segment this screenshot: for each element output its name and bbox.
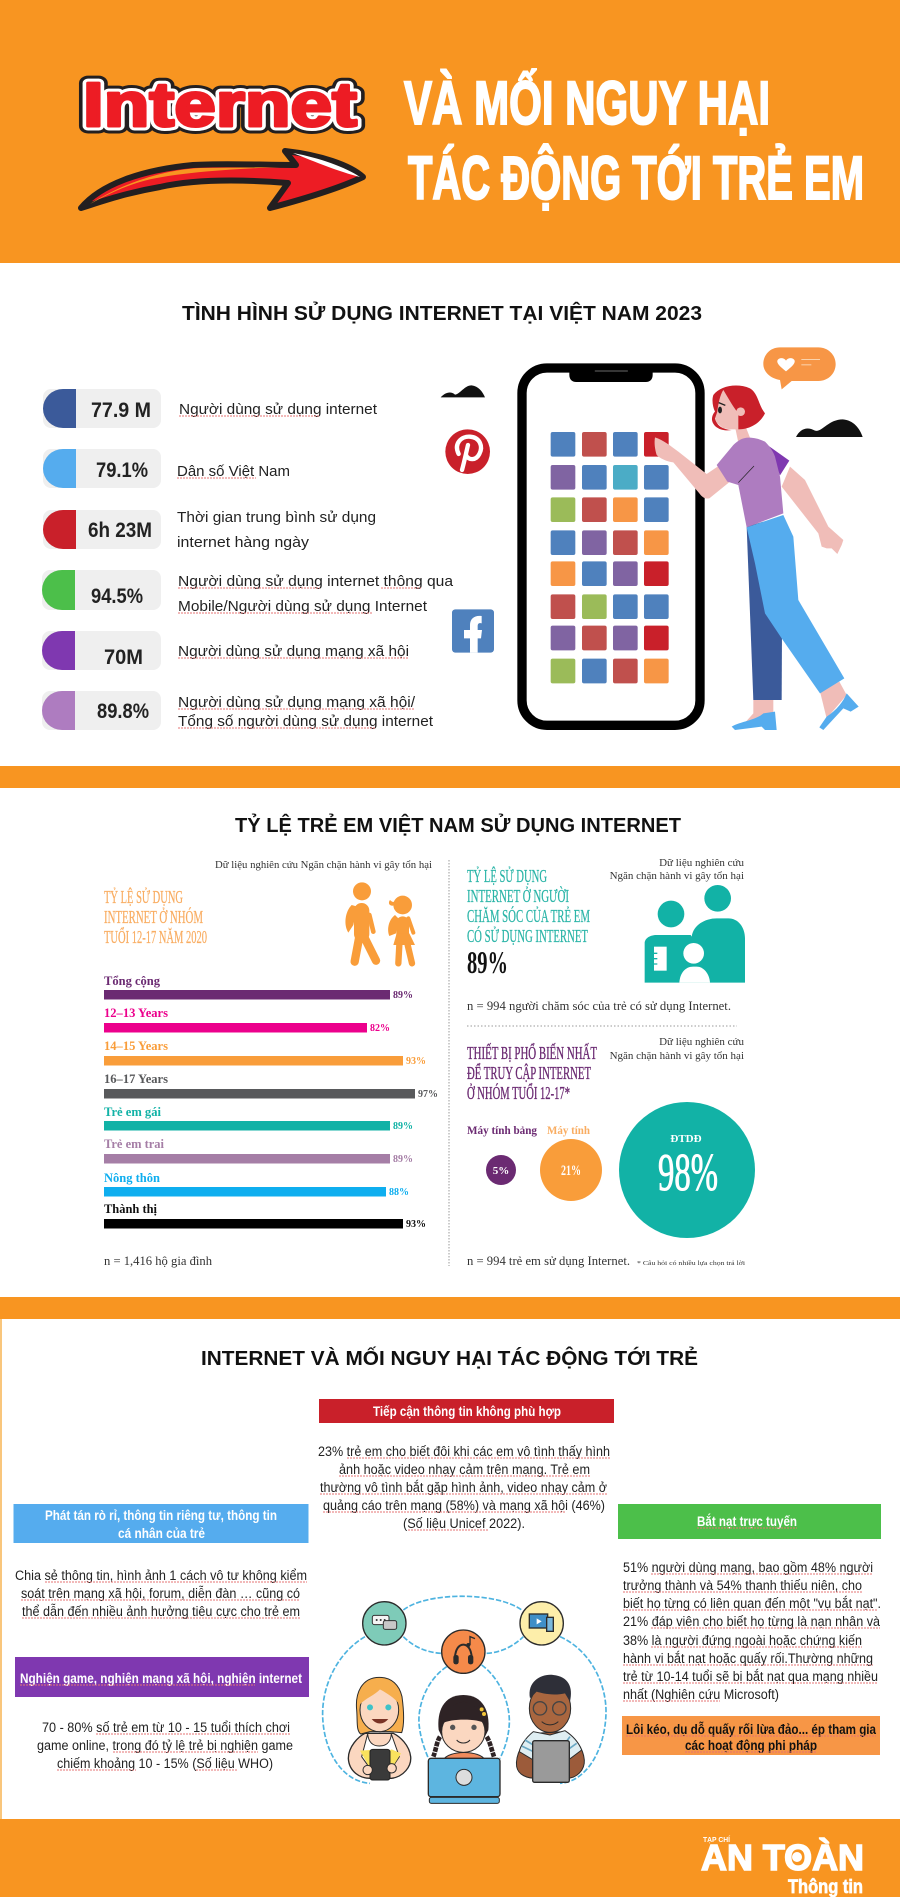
stat: social share — [42, 691, 434, 730]
stat: social network users: Người dùng sử dụng mạng xã hội — [178, 643, 409, 660]
heading bar: cá nhân của trẻ — [118, 1526, 205, 1541]
body text: 23% trẻ em cho biết đôi khi các em vô tình thấy hình — [318, 1444, 610, 1459]
bar: boys — [104, 1136, 413, 1165]
stat: mobile share: Người dùng sử dụng internet thông qua — [178, 573, 454, 590]
chart title: TỶ LỆ SỬ DỤNG — [104, 886, 183, 907]
bar: rural: 88% — [389, 1187, 409, 1198]
body text — [15, 1568, 307, 1619]
dashed connection lines — [323, 1596, 606, 1783]
body text: trưởng thành và 54% thanh thiếu niên, cho — [623, 1578, 862, 1593]
caregiver title: INTERNET Ở NGƯỜI — [467, 885, 569, 906]
body text: Chia sẻ thông tin, hình ảnh 1 cách vô tư không kiểm — [15, 1568, 307, 1583]
Internet wordmark: Internet — [83, 71, 357, 140]
logo — [701, 1835, 864, 1897]
stat: daily time online: 6h 23M — [88, 519, 152, 542]
icon: two children with backpacks — [345, 882, 415, 963]
heading bar — [14, 1504, 308, 1543]
icon: pinterest — [445, 429, 490, 474]
body text: quảng cáo trên mạng (58%) và mạng xã hội (46%) — [323, 1498, 605, 1513]
bar: total: Tổng cộng — [104, 973, 160, 988]
panel: usage statistics — [42, 389, 454, 730]
bar: 12-13: 82% — [370, 1023, 390, 1034]
stat: mobile share: 94.5% — [91, 585, 143, 608]
body text: game online, trong đó tỷ lệ trẻ bị nghiện game — [37, 1738, 293, 1753]
stat: population: 79.1% — [96, 459, 148, 482]
bar chart — [104, 973, 438, 1230]
illustration: children using devices — [323, 1596, 606, 1803]
heading bar: Bắt nạt trực tuyến — [697, 1514, 797, 1529]
bar: urban: Thành thị — [104, 1201, 157, 1216]
panel: addiction — [15, 1657, 309, 1771]
heading bar — [618, 1504, 881, 1539]
Internet wordmark: Internet — [83, 71, 357, 140]
bar: girls: 89% — [393, 1121, 413, 1132]
app grid — [551, 432, 669, 683]
heading bar: Phát tán rò rỉ, thông tin riêng tư, thông tin — [45, 1508, 277, 1523]
heading bar — [15, 1657, 309, 1697]
footer band — [0, 1819, 900, 1897]
body text: biết họ từng có liên quan đến một "vụ bắt nạt". — [623, 1596, 881, 1611]
icon: small cloud — [441, 385, 485, 397]
header band — [0, 0, 900, 263]
logo: TẠP CHÍ — [703, 1835, 731, 1844]
heading bar: Nghiện game, nghiện mạng xã hội, nghiện internet — [20, 1671, 302, 1686]
callout — [622, 1716, 880, 1755]
body text: chiếm khoảng 10 - 15% (Số liệu WHO) — [57, 1756, 273, 1771]
footnote: * Câu hỏi có nhiều lựa chọn trả lời — [637, 1260, 745, 1267]
bar: girls: Trẻ em gái — [104, 1104, 161, 1119]
divider band 2 — [0, 1297, 900, 1319]
device title: ĐỂ TRUY CẬP INTERNET — [467, 1062, 591, 1083]
chart title: INTERNET Ở NHÓM — [104, 906, 203, 927]
body text: 38% là người đứng ngoài hoặc chứng kiến — [623, 1633, 862, 1648]
body text: hành vi bắt nạt hoặc quấy rối.Thường những — [623, 1651, 873, 1666]
phone share: ĐTDĐ — [670, 1133, 702, 1145]
phone share: 98% — [658, 1144, 718, 1202]
bar: 14-15 — [104, 1038, 426, 1067]
body text: thường vô tình bắt gặp hình ảnh, video nhạy cảm ở — [320, 1480, 607, 1495]
stat: social share: 89.8% — [97, 700, 149, 723]
body text: thể dẫn đến nhiều ảnh hưởng tiêu cực cho trẻ em — [22, 1604, 300, 1619]
main title — [404, 69, 864, 212]
bar: 16-17: 16–17 Years — [104, 1071, 168, 1086]
sample size note: n = 1,416 hộ gia đình — [104, 1254, 213, 1268]
heading: dangers to children: INTERNET VÀ MỐI NGUY HẠI TÁC ĐỘNG TỚI TRẺ — [201, 1346, 698, 1370]
bar: 12-13 — [104, 1005, 390, 1034]
panel: usage by age group — [104, 859, 438, 1268]
stat: social network users — [42, 631, 409, 670]
sample note: n = 994 trẻ em sử dụng Internet. — [467, 1254, 630, 1268]
tablet share: Máy tính bảng — [467, 1125, 537, 1137]
caregiver title: CÓ SỬ DỤNG INTERNET — [467, 925, 588, 946]
body text: ảnh hoặc video nhạy cảm trên mạng. Trẻ em — [339, 1462, 590, 1477]
bar: total — [104, 973, 413, 1001]
stat: social share: Người dùng sử dụng mạng xã hội/ — [178, 694, 416, 711]
stat: daily time online: Thời gian trung bình sử dụng — [177, 509, 376, 526]
callout: các hoạt động phi pháp — [685, 1738, 817, 1753]
source note — [610, 1036, 744, 1062]
body text — [37, 1720, 293, 1771]
heading bar: Tiếp cận thông tin không phù hợp — [373, 1404, 561, 1419]
bar: 14-15: 93% — [406, 1056, 426, 1067]
computer share: 21% — [561, 1163, 581, 1179]
device title — [467, 1042, 597, 1103]
bar: 12-13: 12–13 Years — [104, 1005, 168, 1020]
device title: Ở NHÓM TUỔI 12-17* — [467, 1082, 570, 1103]
body text: (Số liệu Unicef 2022). — [403, 1516, 525, 1531]
caregiver figure: 89% — [467, 944, 508, 980]
Internet wordmark: Internet — [83, 71, 357, 140]
bar: total: 89% — [393, 990, 413, 1001]
stat: population: Dân số Việt Nam — [177, 463, 290, 480]
icon: facebook — [452, 609, 494, 653]
stat: internet users — [43, 389, 378, 428]
panel: devices — [467, 1036, 755, 1268]
caregiver title — [467, 865, 590, 946]
source note: Dữ liệu nghiên cứu — [659, 857, 744, 869]
stat: internet users: Người dùng sử dụng internet — [179, 401, 378, 418]
source note: Dữ liệu nghiên cứu — [659, 1036, 744, 1048]
bar: urban: 93% — [406, 1219, 426, 1230]
body text: 51% người dùng mạng, bao gồm 48% người — [623, 1560, 873, 1575]
sample note: n = 994 người chăm sóc của trẻ có sử dụng Internet. — [467, 999, 731, 1013]
body text — [318, 1444, 610, 1531]
bar: urban — [104, 1201, 426, 1230]
heading: children internet rate: TỶ LỆ TRẺ EM VIỆT NAM SỬ DỤNG INTERNET — [235, 813, 681, 837]
icon: video — [520, 1602, 563, 1645]
stat: social network users: 70M — [104, 646, 143, 669]
icon: chat — [363, 1602, 406, 1645]
chart title — [104, 886, 207, 947]
device title: THIẾT BỊ PHỔ BIẾN NHẤT — [467, 1042, 597, 1063]
phone share — [619, 1102, 755, 1238]
body text — [623, 1560, 881, 1702]
illustration: woman with giant phone — [441, 347, 863, 730]
woman — [655, 386, 859, 730]
bar: 16-17 — [104, 1071, 438, 1100]
stat: daily time online — [43, 509, 376, 551]
bar: rural — [104, 1170, 409, 1198]
stat: population — [43, 449, 290, 488]
stat: social share: Tổng số người dùng sử dụng internet — [178, 713, 434, 730]
divider band 1 — [0, 766, 900, 788]
caregiver title: CHĂM SÓC CỦA TRẺ EM — [467, 905, 590, 926]
body text: 21% đáp viên cho biết họ từng là nạn nhân và — [623, 1614, 880, 1629]
caregiver title: TỶ LỆ SỬ DỤNG — [467, 865, 547, 886]
icon: right cloud — [796, 419, 863, 437]
child: girl with laptop — [428, 1695, 500, 1803]
phone — [522, 368, 700, 725]
computer share — [540, 1125, 602, 1201]
body text: soát trên mạng xã hội, forum, diễn đàn … cũng có — [21, 1586, 300, 1601]
panel: privacy leaks — [14, 1504, 308, 1619]
source note: Dữ liệu nghiên cứu Ngăn chặn hành vi gây tổn hại — [215, 859, 432, 871]
bar: 16-17: 97% — [418, 1089, 438, 1100]
source note: Ngăn chặn hành vi gây tổn hại — [610, 870, 744, 882]
source note: Ngăn chặn hành vi gây tổn hại — [610, 1050, 744, 1062]
arrow — [81, 151, 363, 208]
bar: boys: Trẻ em trai — [104, 1136, 164, 1151]
logo: AN TOÀN — [701, 1837, 864, 1878]
icon: parents and child — [645, 885, 745, 983]
body text: nhất (Nghiên cứu Microsoft) — [623, 1687, 779, 1702]
source note — [610, 857, 744, 882]
panel: cyberbullying — [618, 1504, 881, 1755]
chart title: TUỔI 12-17 NĂM 2020 — [104, 926, 207, 947]
child: blonde girl with phone — [348, 1677, 411, 1780]
computer share: Máy tính — [547, 1125, 591, 1137]
icon: headphones — [442, 1630, 485, 1673]
stat: mobile share — [42, 570, 454, 615]
panel: inappropriate content — [318, 1399, 614, 1531]
body text: 70 - 80% số trẻ em từ 10 - 15 tuổi thích chơi — [42, 1720, 290, 1735]
stat: mobile share: Mobile/Người dùng sử dụng Internet — [178, 598, 428, 615]
panel: caregivers — [467, 857, 745, 1013]
tablet share — [467, 1125, 537, 1185]
bar: 14-15: 14–15 Years — [104, 1038, 168, 1053]
heading bar — [319, 1399, 614, 1423]
bar: boys: 89% — [393, 1154, 413, 1165]
child: boy with tablet — [516, 1675, 584, 1782]
bar: rural: Nông thôn — [104, 1170, 161, 1185]
stat: daily time online: internet hàng ngày — [177, 534, 310, 551]
stat: internet users: 77.9 M — [91, 399, 151, 422]
speech bubble — [763, 347, 836, 389]
bar: girls — [104, 1104, 413, 1132]
heading: internet usage in Vietnam: TÌNH HÌNH SỬ DỤNG INTERNET TẠI VIỆT NAM 2023 — [182, 301, 702, 325]
body text: trẻ từ 10-14 tuổi sẽ bị bắt nạt qua mạng nhiều — [623, 1669, 878, 1684]
tablet share: 5% — [493, 1165, 509, 1177]
